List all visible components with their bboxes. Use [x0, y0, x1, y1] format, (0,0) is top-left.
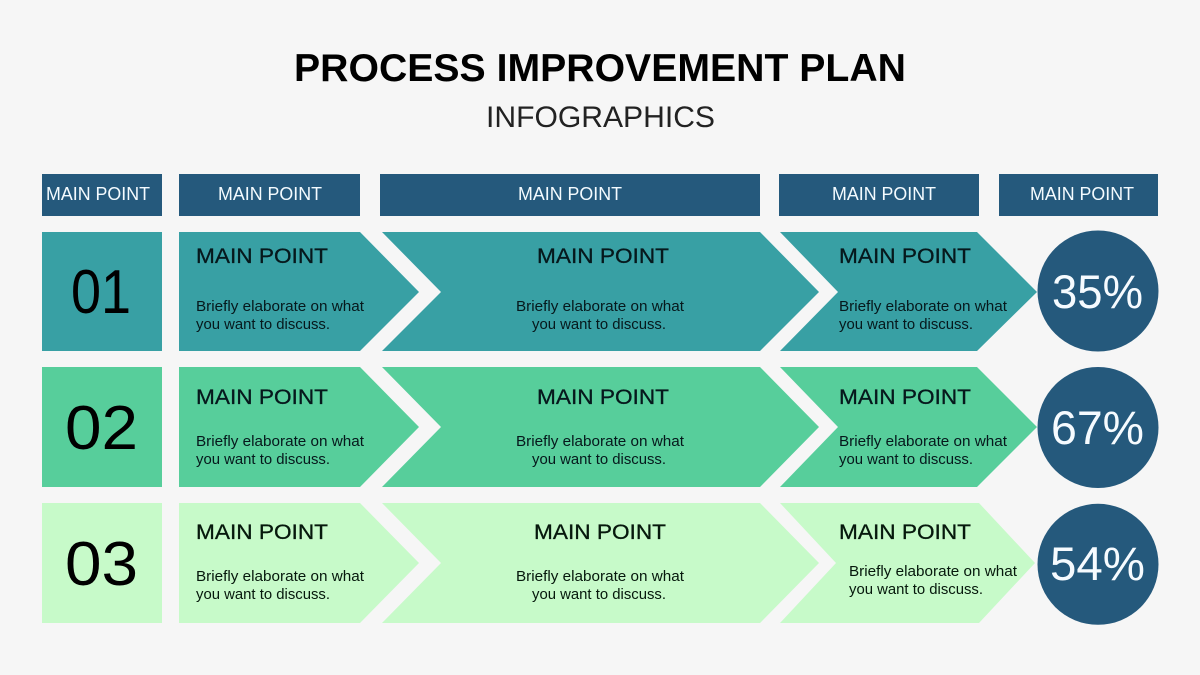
arrow 1-3: MAIN POINT — [839, 245, 971, 268]
arrow 2-1 — [179, 367, 419, 487]
arrow 2-2: MAIN POINT — [537, 386, 669, 409]
arrow 2-2 — [382, 367, 819, 487]
arrow 3-2 — [382, 503, 819, 623]
arrow 3-2: Briefly elaborate on what — [516, 569, 684, 585]
arrow 2-1: Briefly elaborate on what — [196, 434, 364, 450]
header row — [42, 174, 1158, 216]
row 3 — [42, 503, 1158, 625]
row 2 — [42, 367, 1158, 488]
arrow 3-3: MAIN POINT — [839, 521, 971, 544]
arrow 1-2: Briefly elaborate on what — [516, 299, 684, 315]
arrow 3-3: you want to discuss. — [849, 582, 983, 598]
circle 35%: 35% — [1052, 265, 1143, 318]
arrow 2-2: Briefly elaborate on what — [516, 434, 684, 450]
circle 35% — [1038, 230, 1158, 352]
arrow 3-1: MAIN POINT — [196, 521, 328, 544]
arrow 3-1 — [179, 503, 419, 623]
number box 01: 01 — [71, 258, 131, 327]
number box 03: 03 — [65, 530, 138, 599]
number box 01 — [42, 232, 162, 351]
header 2 — [179, 174, 360, 216]
arrow 1-2 — [382, 232, 819, 351]
arrow 3-1: Briefly elaborate on what — [196, 569, 364, 585]
header 5 — [999, 174, 1158, 216]
circle 67% — [1038, 367, 1158, 488]
arrow 1-3 — [780, 232, 1037, 351]
circle 54% — [1038, 504, 1158, 625]
header 1: MAIN POINT — [46, 184, 150, 204]
arrow 1-1: MAIN POINT — [196, 245, 328, 268]
header 1 — [42, 174, 162, 216]
header 4: MAIN POINT — [832, 184, 936, 204]
header 3 — [380, 174, 760, 216]
arrow 2-1: MAIN POINT — [196, 386, 328, 409]
header 3: MAIN POINT — [518, 184, 622, 204]
arrow 1-3: you want to discuss. — [839, 317, 973, 333]
arrow 1-2: MAIN POINT — [537, 245, 669, 268]
arrow 3-1: you want to discuss. — [196, 587, 330, 603]
arrow 2-3: MAIN POINT — [839, 386, 971, 409]
arrow 2-3 — [780, 367, 1037, 487]
arrow 2-3: Briefly elaborate on what — [839, 434, 1007, 450]
number box 03 — [42, 503, 162, 623]
arrow 2-2: you want to discuss. — [532, 452, 666, 468]
number box 02 — [42, 367, 162, 487]
arrow 1-2: you want to discuss. — [532, 317, 666, 333]
header 2: MAIN POINT — [218, 184, 322, 204]
header 5: MAIN POINT — [1030, 184, 1134, 204]
arrow 2-3: you want to discuss. — [839, 452, 973, 468]
arrow 1-3: Briefly elaborate on what — [839, 299, 1007, 315]
title: PROCESS IMPROVEMENT PLAN — [294, 47, 906, 90]
arrow 3-2: you want to discuss. — [532, 587, 666, 603]
header 4 — [779, 174, 979, 216]
circle 67%: 67% — [1051, 401, 1144, 454]
row 1 — [42, 230, 1158, 352]
arrow 1-1: Briefly elaborate on what — [196, 299, 364, 315]
number box 02: 02 — [65, 394, 138, 463]
arrow 3-3 — [780, 503, 1035, 623]
arrow 1-1 — [179, 232, 419, 351]
arrow 1-1: you want to discuss. — [196, 317, 330, 333]
circle 54%: 54% — [1050, 537, 1145, 590]
arrow 3-2: MAIN POINT — [534, 521, 666, 544]
subtitle: INFOGRAPHICS — [486, 101, 715, 134]
arrow 2-1: you want to discuss. — [196, 452, 330, 468]
arrow 3-3: Briefly elaborate on what — [849, 564, 1017, 580]
